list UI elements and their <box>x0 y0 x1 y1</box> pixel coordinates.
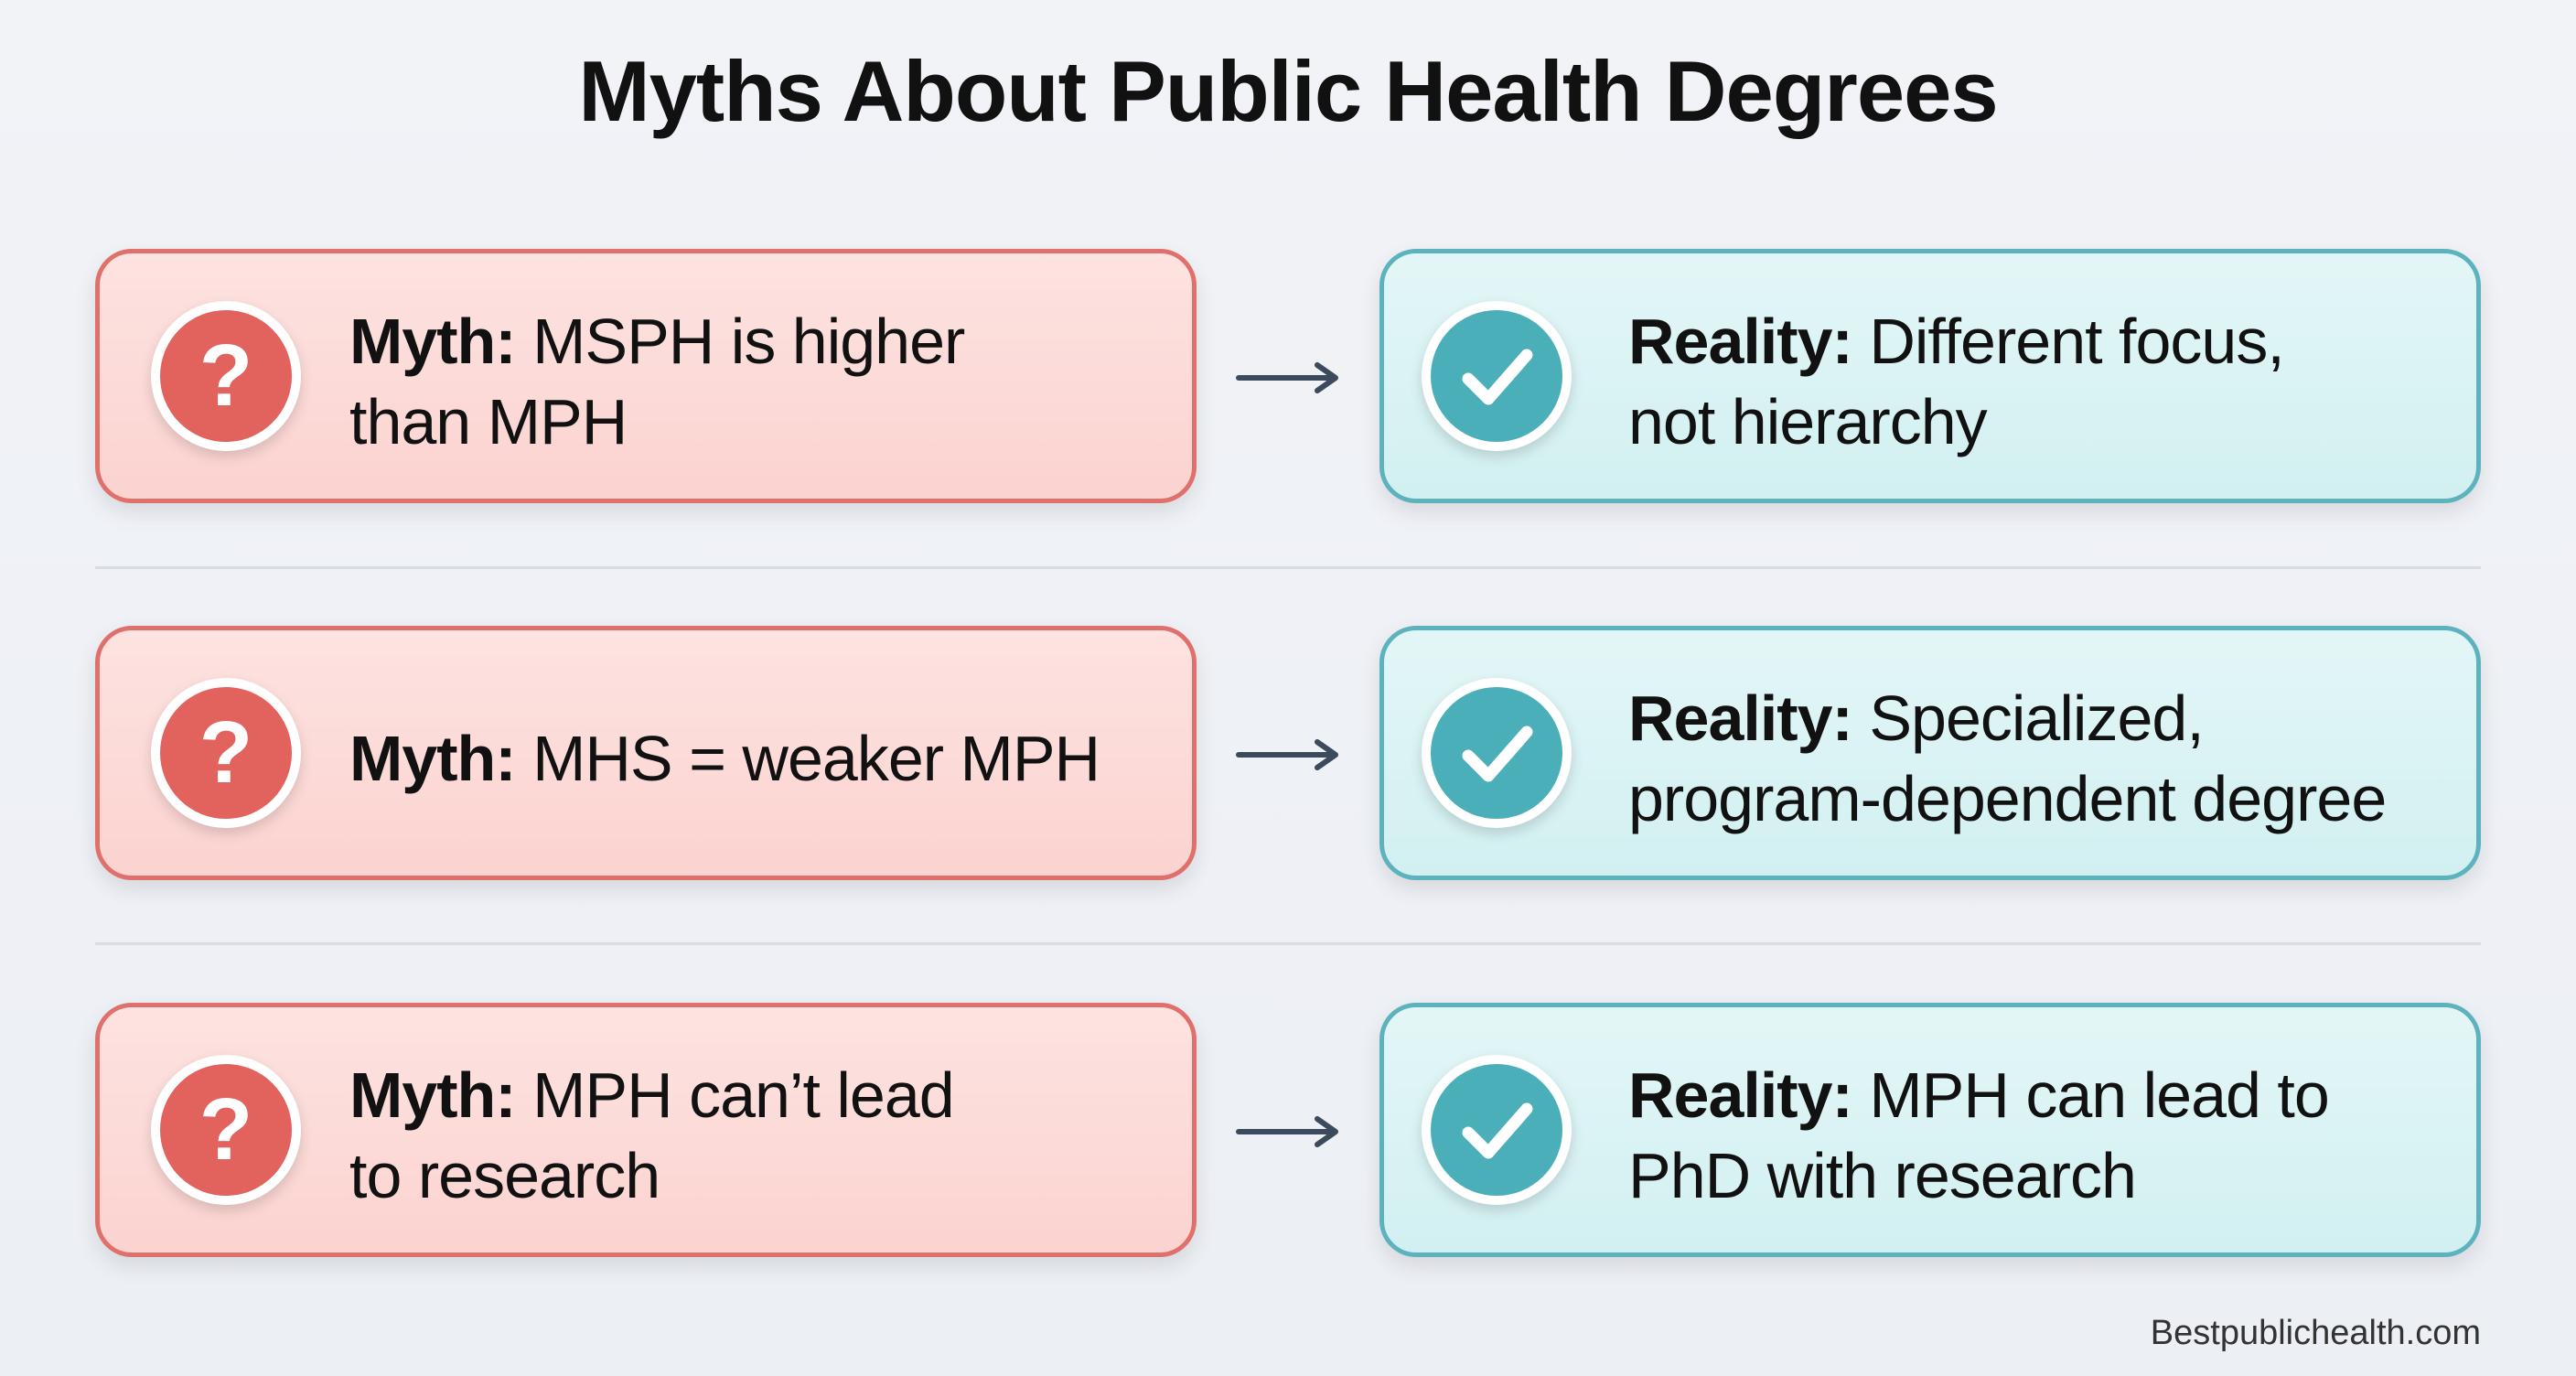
icon: check <box>1422 1055 1572 1205</box>
text: myth 3: Myth: MPH can’t lead <box>349 1059 954 1131</box>
icon: question mark: ? <box>199 327 252 425</box>
icon: question mark <box>151 678 301 828</box>
text: myth 3: to research <box>349 1140 660 1211</box>
text: myth 1 <box>349 306 964 457</box>
panel: reality 3 <box>1379 1003 2481 1257</box>
text: reality 2 <box>1628 683 2386 834</box>
panel: reality 1 <box>1379 249 2481 503</box>
text: reality 2: program-dependent degree <box>1628 763 2386 834</box>
text: reality 3: Reality: MPH can lead to <box>1628 1059 2329 1131</box>
title: Myths About Public Health Degrees <box>578 43 1998 139</box>
arrow 2 <box>1236 739 1338 770</box>
text: reality 3 <box>1628 1059 2329 1211</box>
icon: question mark: ? <box>199 704 252 801</box>
text: reality 1 <box>1628 306 2284 457</box>
text: reality 3: PhD with research <box>1628 1140 2136 1211</box>
text: reality 1: Reality: Different focus, <box>1628 306 2284 377</box>
arrow 1 <box>1236 362 1338 393</box>
text: myth 1: Myth: MSPH is higher <box>349 306 964 377</box>
panel: reality 2 <box>1379 626 2481 880</box>
text: myth 2: Myth: MHS = weaker MPH <box>349 723 1100 794</box>
panel: myth 3 <box>95 1003 1197 1257</box>
text: reality 2: Reality: Specialized, <box>1628 683 2204 754</box>
panel: myth 2 <box>95 626 1197 880</box>
icon: check <box>1422 301 1572 451</box>
icon: check <box>1422 678 1572 828</box>
icon: question mark <box>151 1055 301 1205</box>
icon: question mark <box>151 301 301 451</box>
text: myth 1: than MPH <box>349 386 627 457</box>
icon: question mark: ? <box>199 1080 252 1178</box>
footer credit: Bestpublichealth.com <box>2151 1314 2481 1352</box>
arrow 3 <box>1236 1116 1338 1147</box>
text: myth 3 <box>349 1059 954 1211</box>
panel: myth 1 <box>95 249 1197 503</box>
text: reality 1: not hierarchy <box>1628 386 1987 457</box>
